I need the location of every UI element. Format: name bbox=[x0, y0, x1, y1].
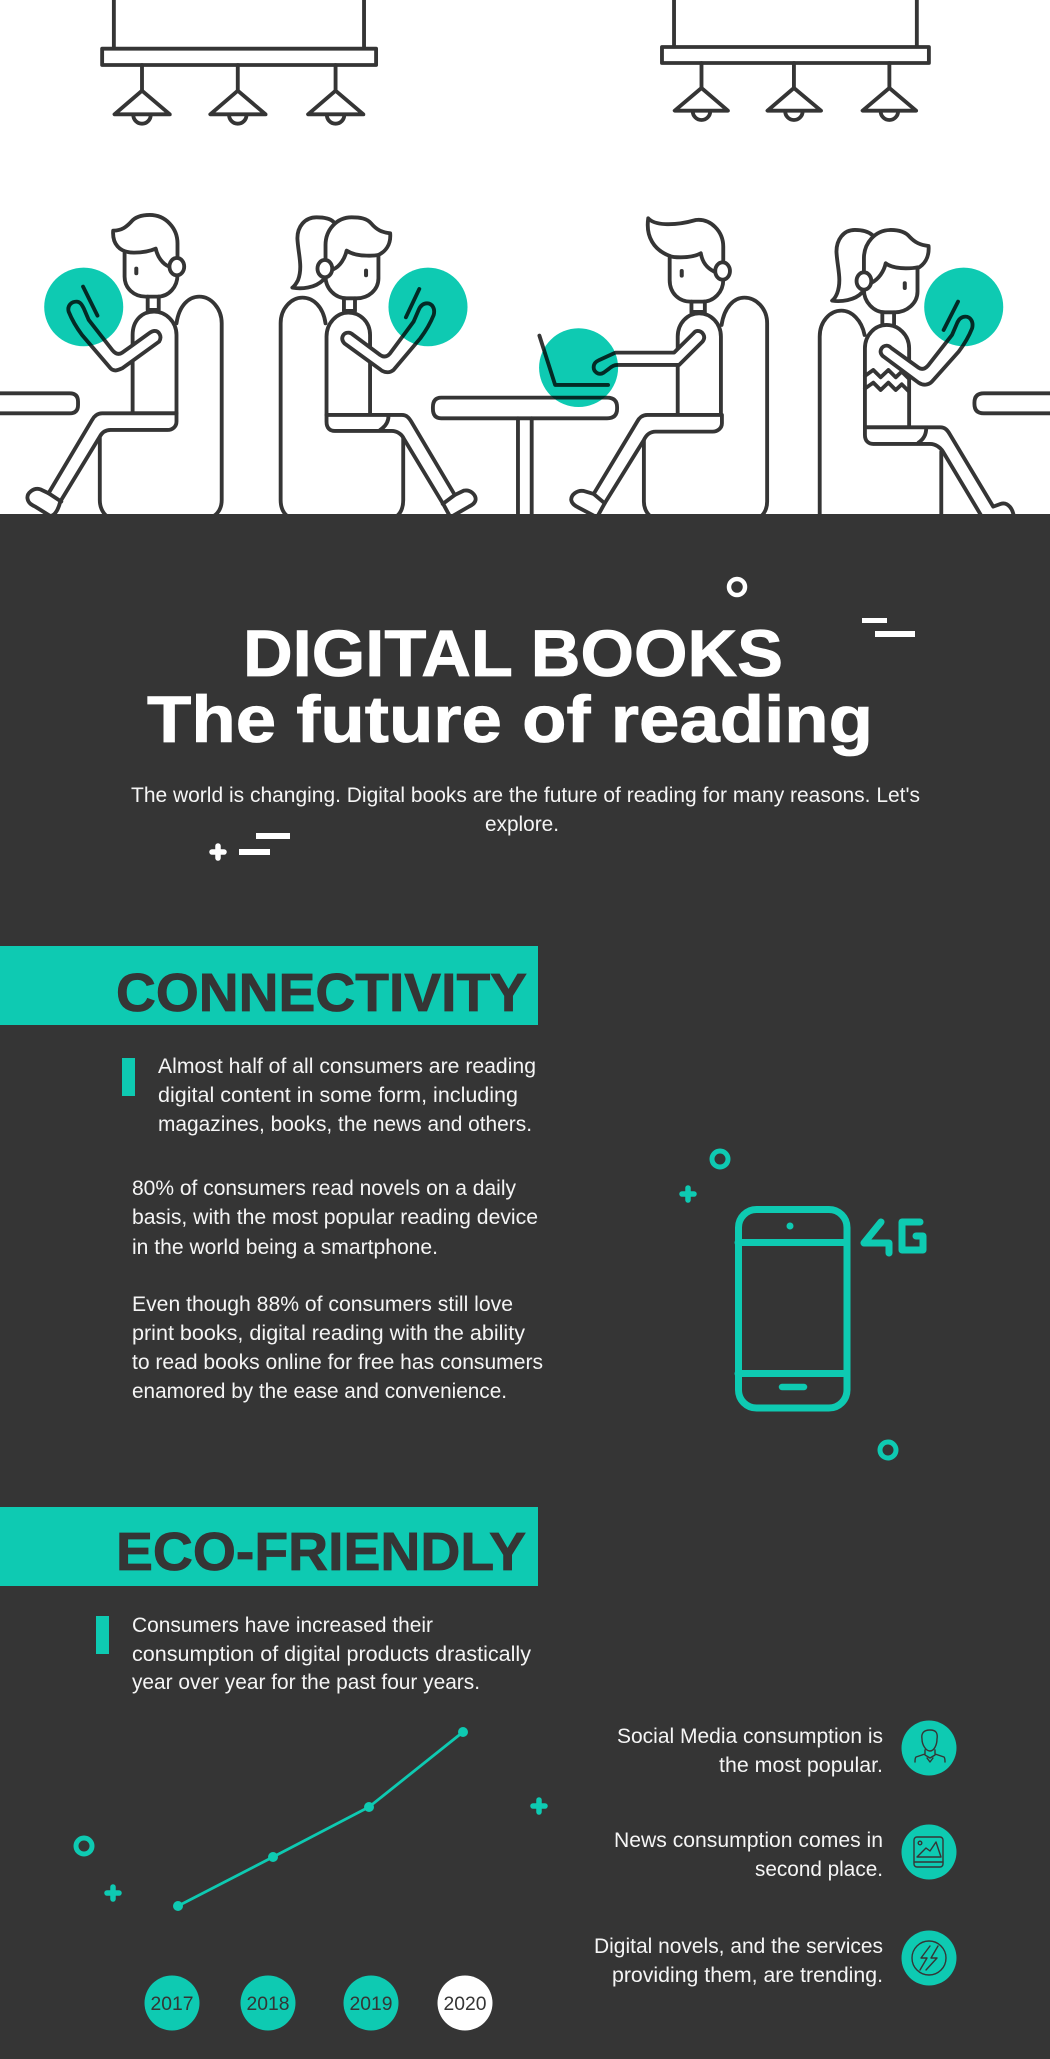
item: news: second place. bbox=[755, 1858, 883, 1881]
table left edge bbox=[0, 393, 78, 413]
table right edge bbox=[974, 393, 1050, 413]
year labels: 2018 bbox=[246, 1994, 290, 2015]
person 2 reading a phone bbox=[281, 217, 476, 517]
line chart bbox=[173, 1727, 468, 1911]
connectivity paragraph 3 bbox=[132, 1293, 543, 1403]
year labels bbox=[144, 1976, 492, 2030]
connectivity paragraph 3: print books, digital reading with the ability bbox=[132, 1322, 526, 1345]
item: news: News consumption comes in bbox=[614, 1829, 883, 1852]
connectivity paragraph 1: magazines, books, the news and others. bbox=[158, 1113, 532, 1136]
intro text: explore. bbox=[485, 813, 559, 836]
person 1 reading a phone bbox=[27, 215, 222, 517]
white decorations around title bbox=[212, 579, 915, 858]
connectivity paragraph 1 bbox=[158, 1055, 536, 1136]
connectivity paragraph 2 bbox=[132, 1177, 538, 1259]
ceiling lamp right bbox=[662, 0, 929, 120]
item: digital novels bbox=[594, 1930, 956, 1987]
item: social media bbox=[617, 1720, 956, 1777]
item: digital novels: Digital novels, and the services bbox=[594, 1935, 883, 1958]
teal decorations around phone bbox=[682, 1151, 896, 1458]
connectivity paragraph 1: Almost half of all consumers are reading bbox=[158, 1055, 536, 1078]
item: news bbox=[614, 1824, 956, 1881]
year labels: 2020 bbox=[444, 1994, 486, 2015]
ceiling lamp left bbox=[102, 0, 376, 124]
connectivity paragraph 2: basis, with the most popular reading device bbox=[132, 1206, 538, 1229]
title: The future of reading bbox=[147, 682, 873, 756]
accent bar bbox=[96, 1616, 109, 1654]
year labels: 2019 bbox=[350, 1994, 392, 2015]
teal decorations around chart bbox=[76, 1800, 545, 1899]
connectivity paragraph 2: 80% of consumers read novels on a daily bbox=[132, 1177, 516, 1200]
intro text bbox=[131, 784, 920, 836]
section heading: eco-friendly bbox=[0, 1507, 538, 1586]
icon: 4G smartphone bbox=[738, 1210, 923, 1408]
title bbox=[147, 616, 873, 756]
item: digital novels: providing them, are trending. bbox=[612, 1964, 883, 1987]
intro text: The world is changing. Digital books are the future of reading for many reasons. Let's bbox=[131, 784, 920, 807]
dark background panel bbox=[0, 514, 1050, 2059]
person 3 using a laptop bbox=[571, 218, 767, 517]
section heading: connectivity: CONNECTIVITY bbox=[116, 963, 527, 1023]
eco-friendly intro text bbox=[132, 1614, 532, 1694]
illustration: people reading in a cafe bbox=[0, 0, 1050, 520]
connectivity paragraph 3: Even though 88% of consumers still love bbox=[132, 1293, 513, 1316]
eco-friendly intro text: year over year for the past four years. bbox=[132, 1671, 480, 1694]
connectivity paragraph 3: to read books online for free has consumers bbox=[132, 1351, 543, 1374]
title: DIGITAL BOOKS bbox=[243, 616, 783, 690]
connectivity paragraph 3: enamored by the ease and convenience. bbox=[132, 1380, 507, 1403]
item: social media: the most popular. bbox=[719, 1754, 883, 1777]
connectivity paragraph 2: in the world being a smartphone. bbox=[132, 1236, 438, 1259]
accent bar bbox=[122, 1058, 135, 1096]
person 4 reading a phone bbox=[820, 230, 1014, 520]
icon: picture bbox=[902, 1824, 956, 1880]
item: social media: Social Media consumption is bbox=[617, 1725, 883, 1748]
section heading: connectivity bbox=[0, 946, 538, 1025]
icon: lightning bbox=[902, 1930, 956, 1986]
year labels: 2017 bbox=[150, 1994, 194, 2015]
connectivity paragraph 1: digital content in some form, including bbox=[158, 1084, 518, 1107]
centre table with laptop bbox=[433, 336, 617, 520]
icon: person bbox=[902, 1720, 956, 1776]
eco-friendly intro text: Consumers have increased their bbox=[132, 1614, 433, 1637]
eco-friendly intro text: consumption of digital products drastically bbox=[132, 1643, 532, 1666]
section heading: eco-friendly: ECO-FRIENDLY bbox=[116, 1522, 526, 1582]
